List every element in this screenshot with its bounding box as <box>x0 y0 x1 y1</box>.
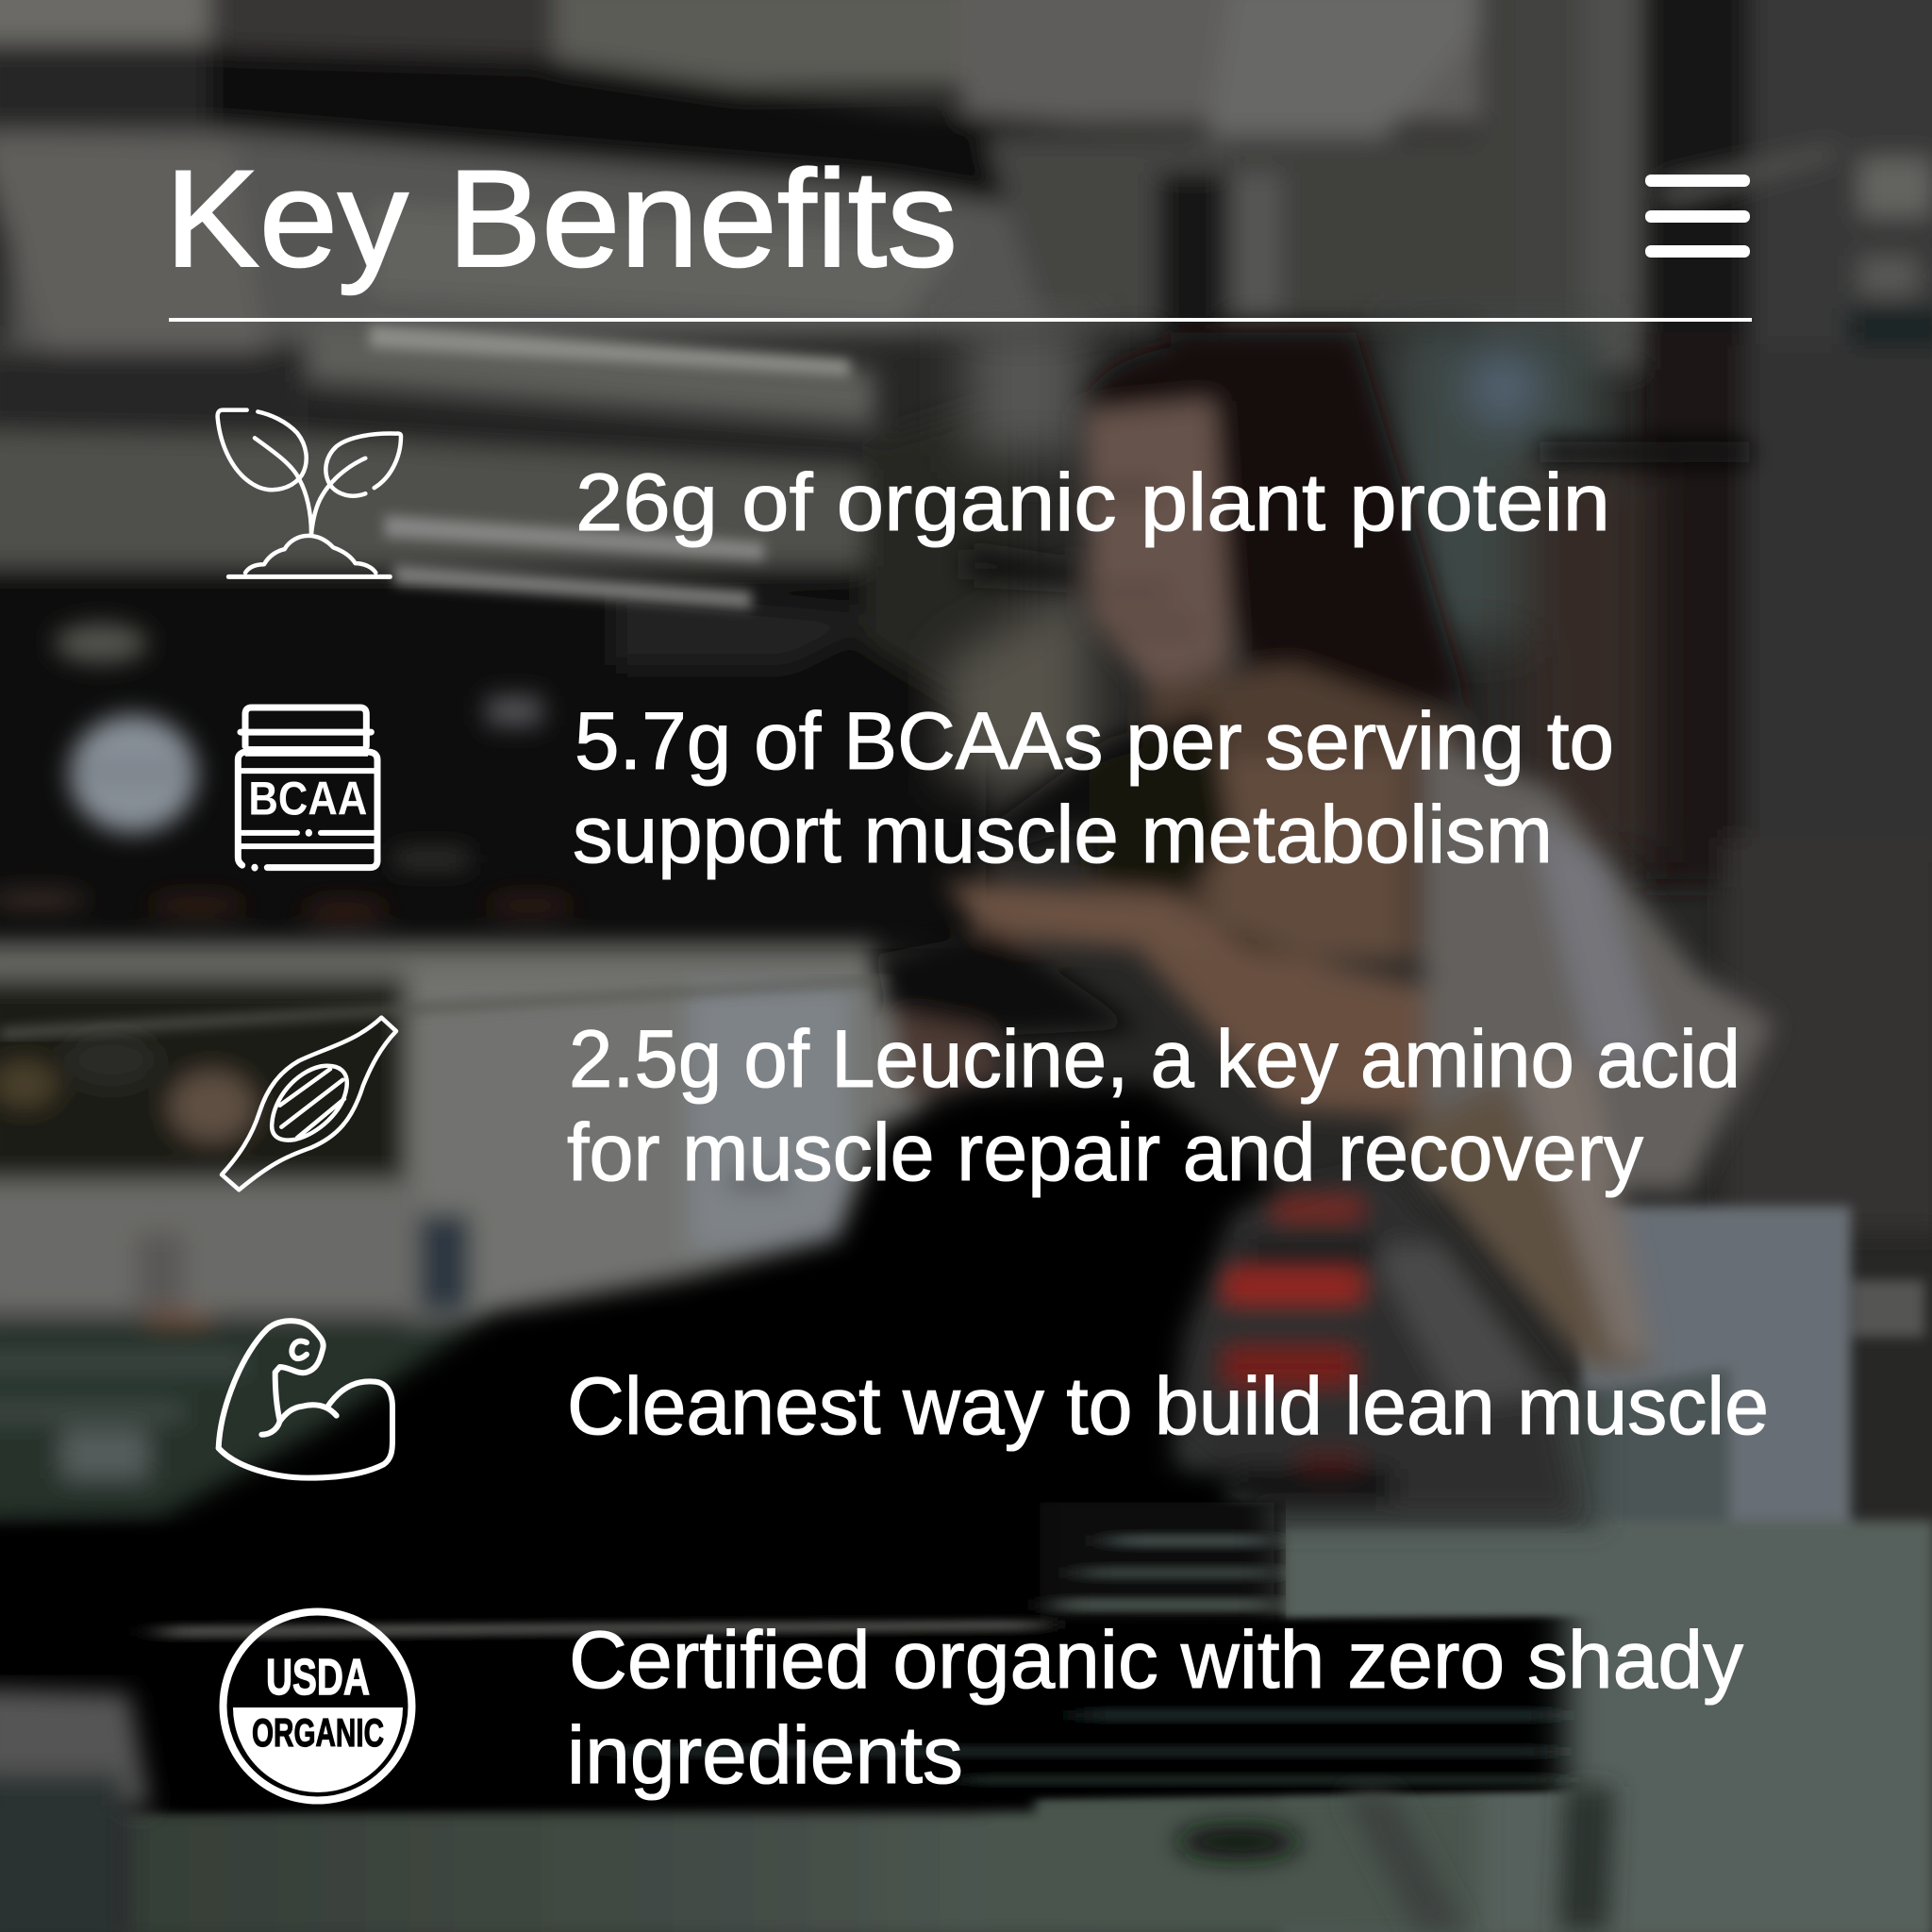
black leggings <box>0 1084 1281 1639</box>
icon: hamburger menu <box>1645 175 1750 258</box>
legs under beam <box>1558 1787 1614 1932</box>
benefit 5 text: Certified organic with zero shady <box>569 1615 1743 1706</box>
seat rails <box>1040 1502 1274 1625</box>
benefit 3 text <box>567 1014 1740 1198</box>
icon: USDA organic seal: USDA <box>266 1649 370 1706</box>
icon: USDA organic seal <box>223 1611 411 1800</box>
icon: sprout <box>218 410 401 576</box>
hand <box>893 1017 998 1096</box>
benefit 2 text <box>573 696 1614 880</box>
benefit 3 text: 2.5g of Leucine, a key amino acid <box>569 1014 1740 1105</box>
benefit 1 text: 26g of organic plant protein <box>575 458 1610 548</box>
icon: flexed bicep <box>219 1321 392 1478</box>
rower beam <box>160 1617 1565 1811</box>
benefit 5 text: ingredients <box>567 1710 963 1801</box>
benefit 2 text: support muscle metabolism <box>573 790 1553 880</box>
bright ceiling streaks <box>370 325 850 377</box>
blue box <box>1582 1207 1851 1539</box>
icon: BCAA jar <box>238 708 377 872</box>
jar label text: BCAA <box>248 773 367 825</box>
hips and red pattern <box>1158 1171 1577 1516</box>
benefit 4 text: Cleanest way to build lean muscle <box>567 1361 1769 1452</box>
wall and window <box>407 967 924 1324</box>
benefit 2 text: 5.7g of BCAAs per serving to <box>575 696 1614 787</box>
title: Key Benefits: Key Benefits <box>165 142 958 295</box>
icon: USDA organic seal: ORGANIC <box>252 1710 384 1755</box>
right columns <box>1516 0 1590 345</box>
floor <box>1281 1521 1932 1932</box>
header divider <box>169 318 1752 322</box>
rail <box>0 977 887 1039</box>
arm <box>943 881 1424 1118</box>
benefit 5 text <box>567 1615 1743 1801</box>
icon: muscle diagram <box>222 1018 396 1190</box>
head and hair <box>1541 441 1750 463</box>
shelves, clock and lights <box>54 624 148 663</box>
hair streaks <box>1424 740 1774 1191</box>
mid left bands <box>0 351 308 443</box>
lower left <box>0 1688 150 1808</box>
benefit 3 text: for muscle repair and recovery <box>567 1108 1643 1198</box>
backdrop behind head <box>1392 321 1602 641</box>
torso <box>1146 665 1466 961</box>
ceiling <box>0 0 209 43</box>
